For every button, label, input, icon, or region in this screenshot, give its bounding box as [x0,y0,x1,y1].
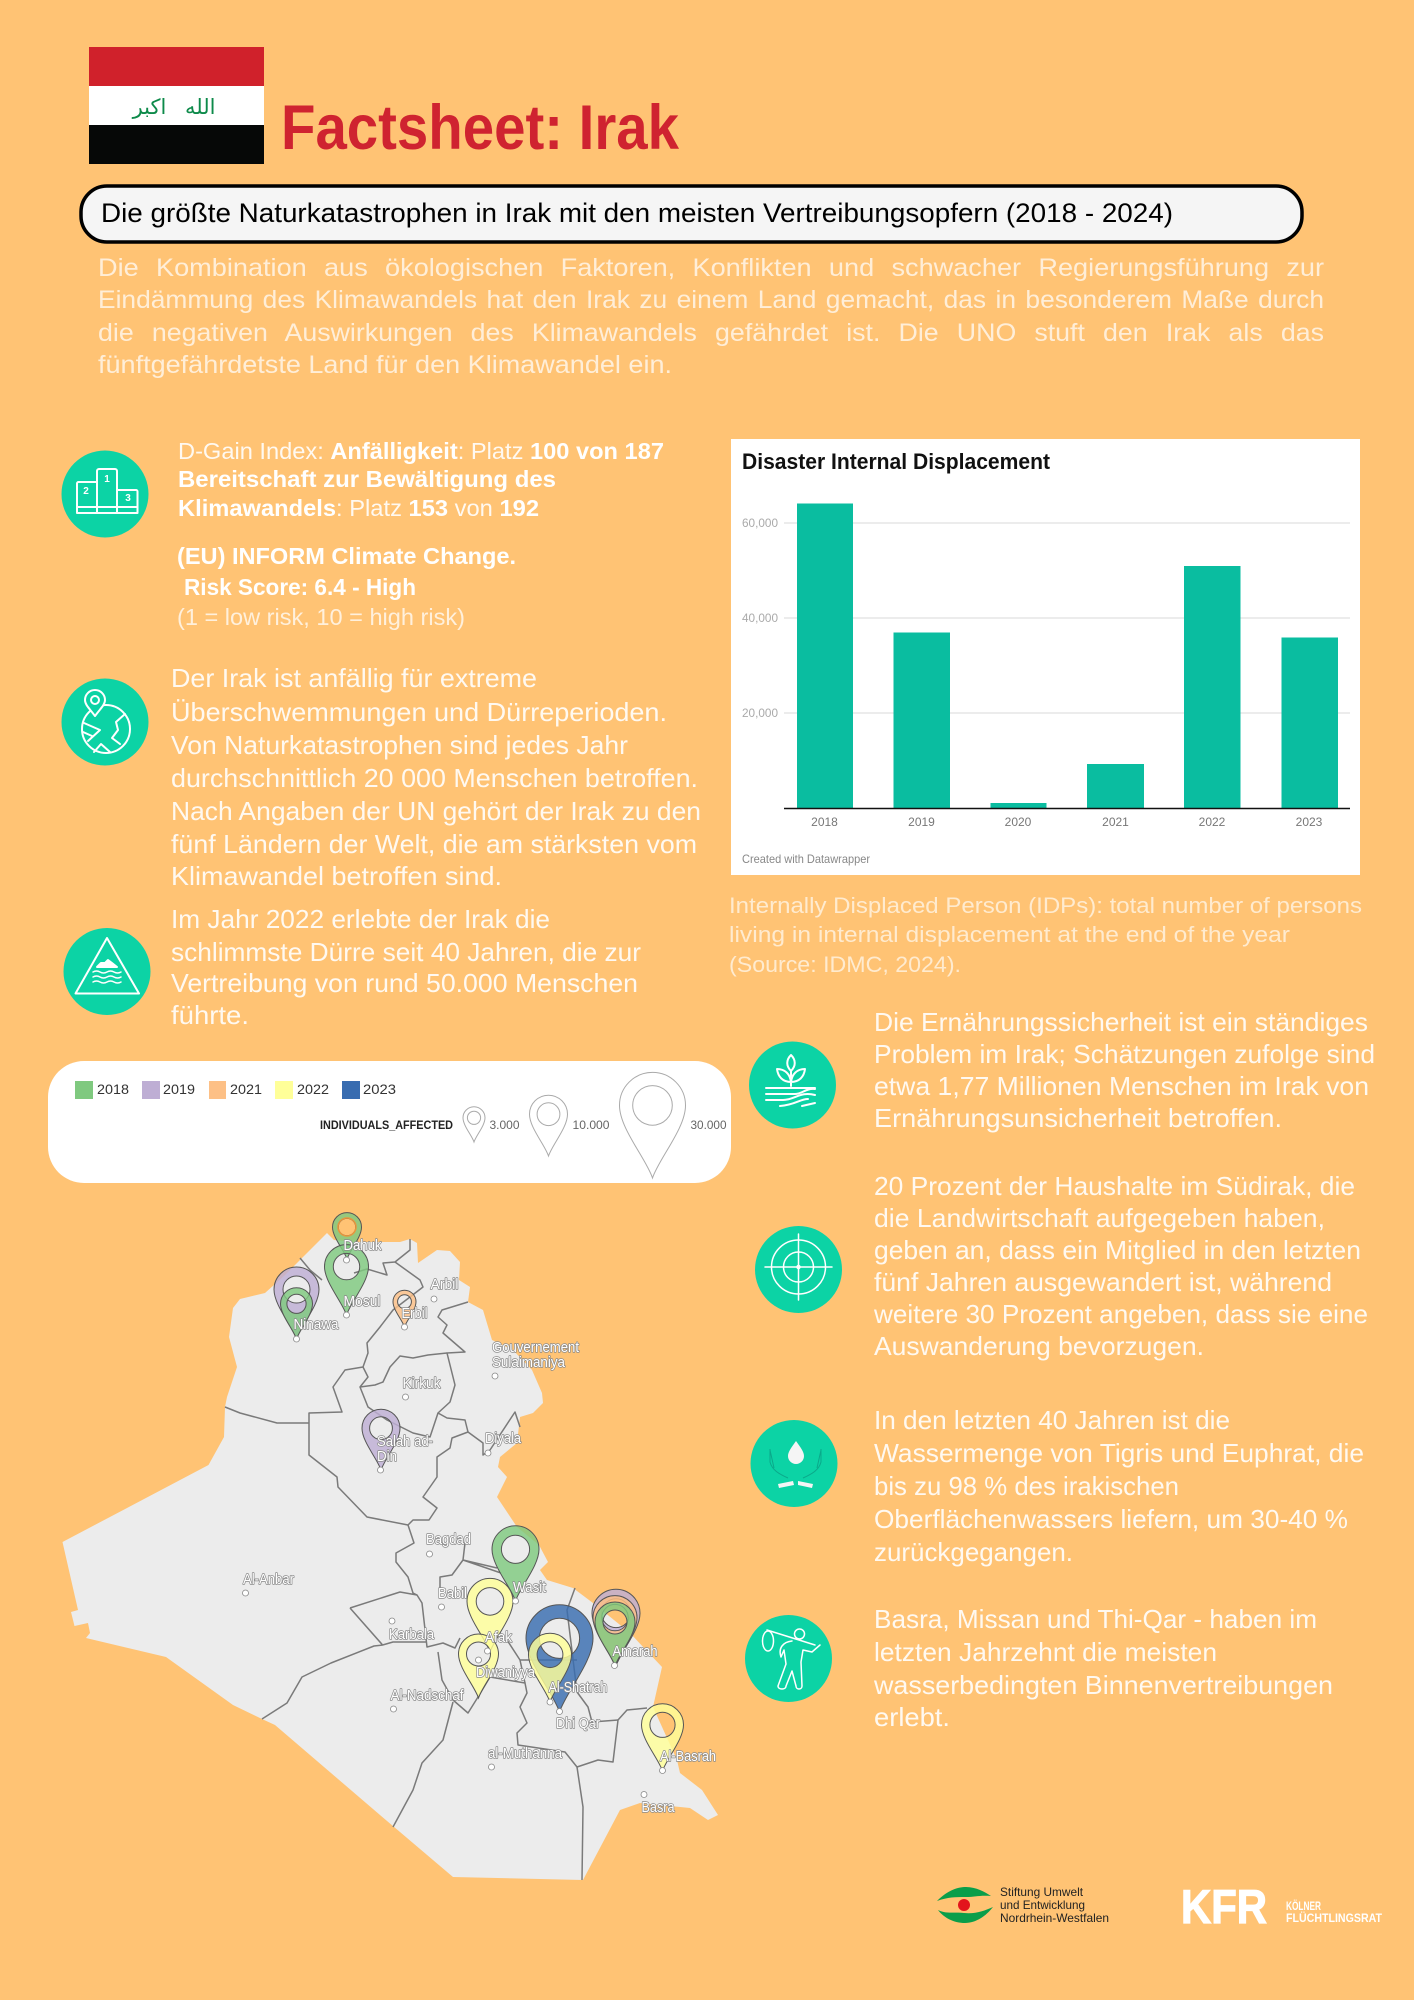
map: place labels: Gouvernement [492,1339,580,1356]
bar chart: disaster internal displacement: 60,000 [742,516,778,530]
map: place labels: Wasit [513,1579,547,1596]
chart caption: Internally Displaced Person (IDPs): total number of persons [729,893,1362,918]
map: place labels: Bagdad [426,1531,471,1548]
map: place labels: Ninawa [294,1316,339,1333]
map: place labels: al-Muthanna [488,1745,563,1762]
map: place labels: Din [377,1448,397,1465]
map of Iraq [62,1213,718,1880]
subtitle banner: Die größte Naturkatastrophen in Irak mit den meisten Vertreibungsopfern (2018 - 2024) [101,198,1173,228]
text block: 2022 drought: Im Jahr 2022 erlebte der Irak die [171,904,550,934]
text block: extreme floods and droughts: Nach Angaben der UN gehört der Irak zu den [171,796,701,826]
intro text block: die negativen Auswirkungen des Klimawandels gefährdet ist. Die UNO stuft den Irak als das [98,319,1324,347]
legend: pin sizes [320,1072,727,1178]
text block: Tigris and Euphrates: In den letzten 40 Jahren ist die [874,1405,1230,1435]
legend: years: 2019 [163,1081,195,1097]
chart caption: living in internal displacement at the end of the year [729,922,1290,947]
legend: pin sizes: 3.000 [490,1118,520,1132]
bar chart: disaster internal displacement: 40,000 [742,611,778,625]
map: place labels: Kirkuk [402,1375,441,1392]
text block: Basra, Missan and Thi-Qar: letzten Jahrzehnt die meisten [874,1637,1217,1667]
map: place labels: Babil [438,1585,467,1602]
text block: indices [177,438,664,630]
text block: Basra, Missan and Thi-Qar: erlebt. [874,1702,950,1732]
text block: households emigration: die Landwirtschaft aufgegeben haben, [874,1203,1325,1233]
chart caption: (Source: IDMC, 2024). [729,952,961,977]
text block: Tigris and Euphrates [874,1405,1364,1567]
map: place labels: Mosul [344,1293,380,1310]
bar chart: disaster internal displacement: 2018 [811,815,838,829]
bar chart: disaster internal displacement [731,439,1360,875]
text block: households emigration: Auswanderung bevorzugen. [874,1331,1204,1361]
map: country outline [62,1233,718,1880]
text block: households emigration: geben an, dass ein Mitglied in den letzten [874,1235,1361,1265]
logo: Stiftung Umwelt und Entwicklung NRW [937,1885,1109,1925]
logo: Kölner Flüchtlingsrat: FLÜCHTLINGSRAT [1286,1910,1383,1925]
text block: Tigris and Euphrates: bis zu 98 % des irakischen [874,1471,1179,1501]
icon: flag of Iraq [89,47,264,164]
map: place labels: Karbala [389,1626,435,1643]
map: place labels: Amarah [612,1643,658,1660]
text block: households emigration: 20 Prozent der Haushalte im Südirak, die [874,1171,1355,1201]
icon: podium: 1 [104,474,110,485]
legend: years: 2022 [297,1081,329,1097]
map legend panel [48,1061,731,1183]
map: place labels: Afak [485,1629,512,1646]
intro text block: fünftgefährdetste Land für den Klimawandel ein. [98,351,672,379]
legend: years: 2018 [97,1081,129,1097]
legend: pin sizes: INDIVIDUALS_AFFECTED [320,1118,453,1132]
intro text block: Eindämmung des Klimawandels hat den Irak zu einem Land gemacht, das in besonderem Maße durch [98,286,1324,314]
text block: extreme floods and droughts: Von Naturkatastrophen sind jedes Jahr [171,730,628,760]
text block: 2022 drought: führte. [171,1000,249,1030]
text block: food security: Ernährungsunsicherheit betroffen. [874,1103,1282,1133]
text block: 2022 drought: schlimmste Dürre seit 40 Jahren, die zur [171,937,641,967]
text block: extreme floods and droughts: Klimawandel betroffen sind. [171,861,502,891]
text block: Basra, Missan and Thi-Qar [873,1604,1333,1732]
map: place labels: Arbil [430,1276,458,1293]
text block: extreme floods and droughts [171,663,701,891]
legend: pin sizes: 30.000 [690,1118,727,1132]
intro text block [98,254,1324,379]
bar chart: disaster internal displacement: 20,000 [742,706,778,720]
chart title: Disaster Internal Displacement [742,449,1051,474]
map: place labels: Dahuk [344,1237,382,1254]
map: place labels [243,1237,716,1816]
map: place labels: Al-Nadschaf [390,1687,464,1704]
text block: Basra, Missan and Thi-Qar: wasserbedingten Binnenvertreibungen [873,1670,1333,1700]
text block: 2022 drought [171,904,641,1030]
text block: indices: D-Gain Index: Anfälligkeit: Platz 100 von 187 [178,438,664,464]
text block: extreme floods and droughts: Der Irak ist anfällig für extreme [171,663,537,693]
text block: Tigris and Euphrates: Oberflächenwassers liefern, um 30-40 % [874,1504,1348,1534]
text block: households emigration: weitere 30 Prozent angeben, dass sie eine [873,1299,1368,1329]
text block: indices: (EU) INFORM Climate Change. [177,543,516,569]
bar chart: disaster internal displacement: 2023 [1296,815,1323,829]
map: place labels: Al-Shatrah [548,1679,608,1696]
map: place labels: Al-Anbar [243,1571,294,1588]
map: pins [274,1213,684,1771]
text block: households emigration [873,1171,1368,1361]
map: place labels: Erbil [402,1305,428,1322]
logo: Stiftung Umwelt und Entwicklung NRW: Stiftung Umwelt [1000,1885,1084,1899]
text block: indices: (1 = low risk, 10 = high risk) [177,604,465,630]
text block: Tigris and Euphrates: zurückgegangen. [874,1537,1073,1567]
icon: water drop in hands [750,1420,838,1507]
map: place labels: Al-Basrah [660,1748,716,1765]
icon: target [755,1226,842,1313]
map: governorate borders [225,1239,647,1880]
map: place labels: Salah ad- [377,1433,433,1450]
text block: food security [874,1007,1375,1133]
logo: Stiftung Umwelt und Entwicklung NRW: und Entwicklung [1000,1898,1085,1912]
text block: Basra, Missan and Thi-Qar: Basra, Missan und Thi-Qar - haben im [874,1604,1317,1634]
logo: Kölner Flüchtlingsrat [1181,1880,1383,1933]
text block: Tigris and Euphrates: Wassermenge von Tigris und Euphrat, die [874,1438,1364,1468]
text block: households emigration: fünf Jahren ausgewandert ist, während [874,1267,1332,1297]
text block: extreme floods and droughts: durchschnittlich 20 000 Menschen betroffen. [171,763,698,793]
logo: Kölner Flüchtlingsrat: KÖLNER [1286,1898,1321,1913]
text block: food security: etwa 1,77 Millionen Menschen im Irak von [874,1071,1369,1101]
intro text block: Die Kombination aus ökologischen Faktoren, Konflikten und schwacher Regierungsführung zur [98,254,1324,282]
icon: plant and field [749,1042,836,1128]
bar chart: disaster internal displacement: 2019 [908,815,935,829]
icon: displaced man carrying bundle [745,1615,832,1702]
icon: podium: 2 [83,486,89,497]
map: place labels: Dhi Qar [556,1715,600,1732]
title: Factsheet: Irak [281,93,680,163]
text block: extreme floods and droughts: Überschwemmungen und Dürreperioden. [171,697,667,727]
legend: pin sizes: 10.000 [572,1118,610,1132]
bar chart: disaster internal displacement: Created with Datawrapper [742,852,870,866]
icon: flood warning triangle [64,928,150,1015]
icon: globe with pin [62,678,148,766]
bar chart: disaster internal displacement: 2022 [1199,815,1226,829]
icon: podium: 3 [125,493,131,504]
text block: food security: Problem im Irak; Schätzungen zufolge sind [874,1039,1375,1069]
logo: Kölner Flüchtlingsrat: KFR [1181,1880,1267,1933]
icon: podium [62,450,148,538]
map: place markers [242,1257,666,1798]
legend: years: 2021 [230,1081,262,1097]
bar chart: disaster internal displacement: 2021 [1102,815,1129,829]
bar chart: disaster internal displacement: 2020 [1005,815,1032,829]
map: place labels: Diwaniyya [476,1664,536,1681]
chart caption [729,893,1362,977]
legend: years [75,1081,396,1099]
legend: years: 2023 [363,1081,396,1097]
logo: Stiftung Umwelt und Entwicklung NRW: Nordrhein-Westfalen [1000,1911,1109,1925]
text block: food security: Die Ernährungssicherheit ist ein ständiges [874,1007,1368,1037]
text block: indices: Bereitschaft zur Bewältigung des [178,466,556,492]
text block: extreme floods and droughts: fünf Ländern der Welt, die am stärksten vom [171,829,697,859]
text block: 2022 drought: Vertreibung von rund 50.000 Menschen [171,968,638,998]
text block: indices: Klimawandels: Platz 153 von 192 [178,495,539,521]
map: place labels: Diyala [485,1430,522,1447]
map: place labels: Sulaimaniya [492,1354,566,1371]
icon: flag of Iraq: الله اكبر [132,95,215,119]
map: place labels: Basra [642,1799,675,1816]
subtitle banner [81,186,1302,242]
text block: indices: Risk Score: 6.4 - High [184,574,416,600]
